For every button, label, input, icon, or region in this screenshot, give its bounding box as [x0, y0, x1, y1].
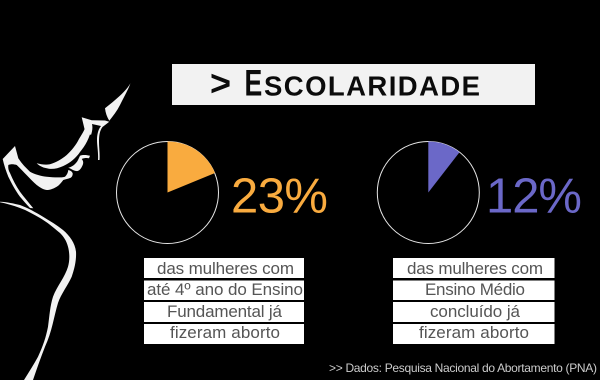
title banner: >	[210, 62, 231, 104]
pie chart: 12%	[377, 142, 479, 244]
description box: concluído já	[430, 302, 521, 321]
description box: Fundamental já	[167, 302, 283, 321]
source note: >> Dados: Pesquisa Nacional do Abortamento (PNA)	[329, 361, 597, 375]
description box	[144, 258, 304, 344]
panel: ensino medio	[377, 142, 582, 344]
pie chart: 23%	[116, 141, 218, 244]
description box: das mulheres com	[157, 259, 294, 278]
stat: 12%: 12%	[486, 170, 582, 224]
description box: das mulheres com	[407, 259, 543, 278]
description box: Ensino Médio	[425, 280, 525, 299]
title banner: SCOLARIDADE	[264, 70, 480, 102]
panel: ensino fundamental	[116, 141, 328, 344]
stat: 23%: 23%	[231, 170, 328, 224]
description box: até 4º ano do Ensino	[147, 280, 303, 299]
title banner	[172, 62, 535, 105]
description box: fizeram aborto	[170, 323, 280, 342]
description box: fizeram aborto	[419, 323, 529, 342]
icon: woman profile silhouette	[0, 83, 130, 380]
title banner: E	[244, 62, 262, 104]
description box	[393, 258, 554, 344]
